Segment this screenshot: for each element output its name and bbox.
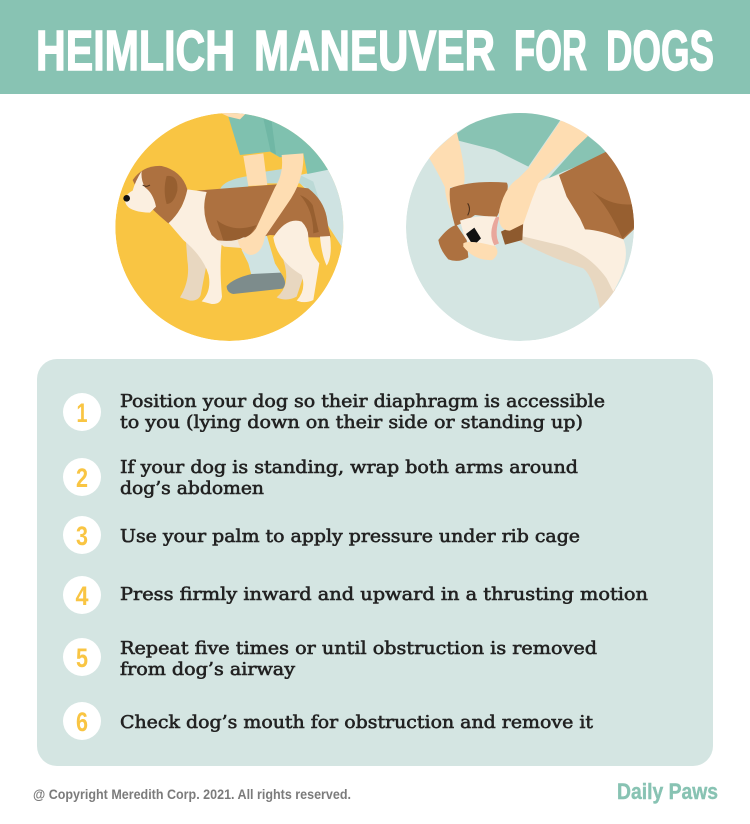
step 1: to you (lying down on their side or standing up) <box>120 412 583 433</box>
step 4: 4 <box>76 581 88 611</box>
step 1 <box>63 391 605 433</box>
step 3: Use your palm to apply pressure under rib cage <box>120 526 580 547</box>
person's shirt <box>220 110 330 174</box>
title: FOR <box>514 19 587 83</box>
step 5: 5 <box>76 643 88 673</box>
step 5: Repeat five times or until obstruction is removed <box>120 638 597 659</box>
step 5 <box>63 638 597 680</box>
step 6 <box>63 702 594 740</box>
illustration: standing dog <box>115 110 350 341</box>
dog tail <box>313 206 331 238</box>
person's shirt <box>457 113 608 178</box>
title: MANEUVER <box>254 19 495 83</box>
title: HEIMLICH <box>36 19 235 83</box>
step 3 <box>63 516 580 554</box>
hand on muzzle <box>463 242 497 260</box>
step 4: Press firmly inward and upward in a thrusting motion <box>120 584 648 605</box>
person's sock <box>227 273 285 294</box>
step 1: 1 <box>76 398 88 428</box>
dog head <box>438 182 523 261</box>
dog chest <box>521 174 626 292</box>
near arm and hand <box>238 153 303 255</box>
brand logo: Daily Paws <box>617 779 718 804</box>
step 6: Check dog’s mouth for obstruction and remove it <box>120 712 594 733</box>
panel: steps <box>37 359 713 766</box>
illustration: checking the dog's mouth <box>406 107 642 341</box>
dog hind leg <box>273 221 319 302</box>
dog chest and front leg <box>168 189 222 304</box>
step 5: from dog’s airway <box>120 659 296 680</box>
step 3: 3 <box>76 521 88 551</box>
far arm <box>243 153 267 186</box>
header banner <box>0 0 750 94</box>
step 2 <box>63 457 578 499</box>
dog belly <box>217 237 246 248</box>
dog body <box>197 184 330 244</box>
step 6: 6 <box>76 707 88 737</box>
person's far arm <box>429 132 464 215</box>
step 2: 2 <box>76 463 88 493</box>
person's near arm and hand <box>499 119 589 231</box>
title <box>36 19 714 83</box>
copyright footer: @ Copyright Meredith Corp. 2021. All rights reserved. <box>33 786 351 802</box>
step 1: Position your dog so their diaphragm is accessible <box>120 391 605 412</box>
far leg <box>520 235 617 308</box>
step 2: If your dog is standing, wrap both arms around <box>120 457 578 478</box>
step 4 <box>63 576 648 614</box>
far legs <box>180 242 206 301</box>
step 2: dog’s abdomen <box>120 478 264 499</box>
dog head <box>123 166 187 223</box>
person's trousers <box>220 168 350 276</box>
dog body <box>559 151 642 239</box>
